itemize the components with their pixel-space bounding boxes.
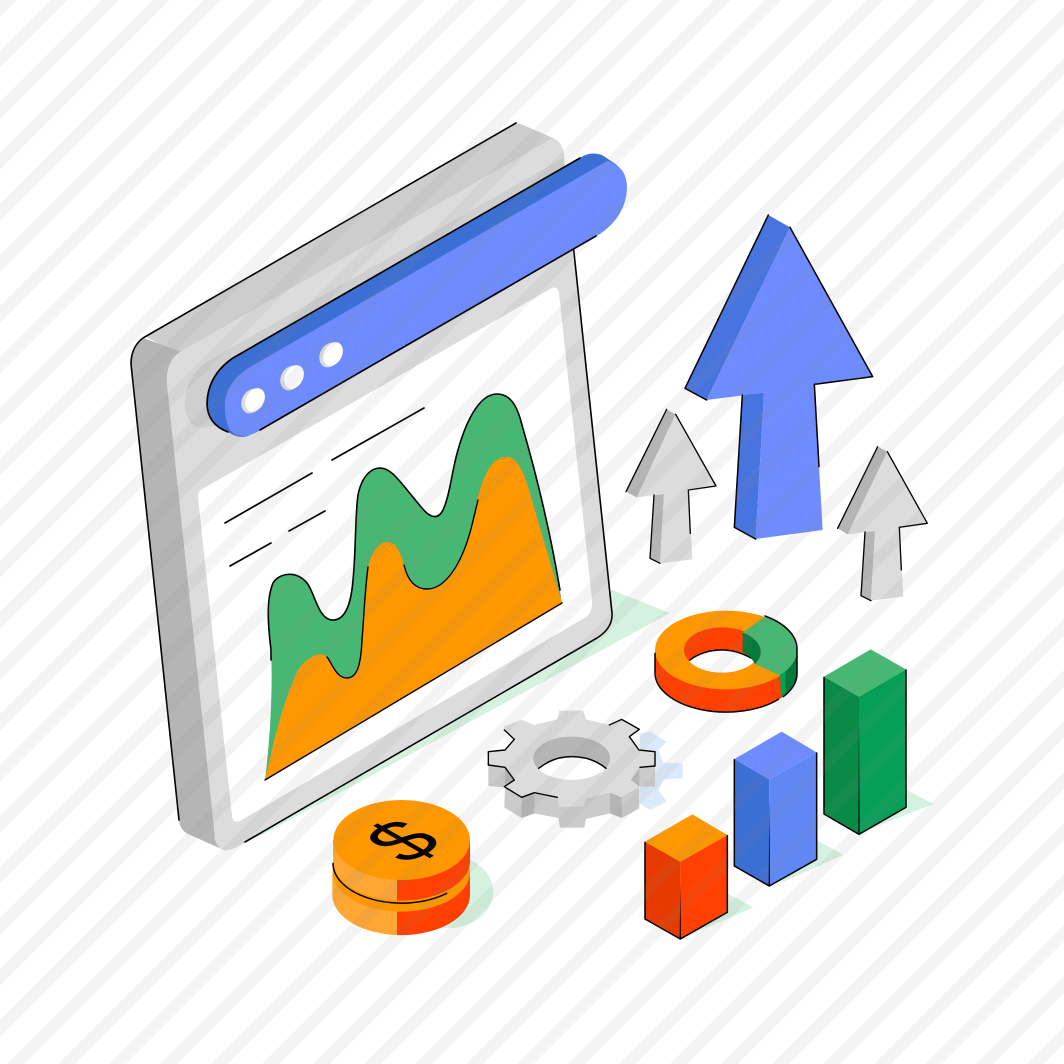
bar: green <box>824 649 933 834</box>
shadow: panel ground shadow <box>240 590 670 845</box>
donut hole opening <box>689 650 754 673</box>
panel top edge <box>145 124 563 356</box>
donut outline <box>655 616 797 712</box>
donut cut face <box>780 671 785 698</box>
arrow: small grey left <box>626 409 716 563</box>
lower objects <box>488 611 933 939</box>
coin face <box>333 800 470 880</box>
gear hole edge <box>539 757 606 768</box>
donut hole wall <box>684 627 760 673</box>
bar: red <box>645 814 753 939</box>
toolbar dot 1 <box>237 385 269 417</box>
panel front face <box>167 138 612 850</box>
gear <box>488 711 683 828</box>
green series <box>265 394 562 780</box>
text lines <box>225 408 424 566</box>
donut side <box>655 650 797 713</box>
gear outline <box>488 719 655 797</box>
toolbar dot 2 <box>276 362 308 394</box>
lower coin top <box>333 832 470 912</box>
screen <box>198 288 592 822</box>
arrow: large blue <box>685 215 873 539</box>
upper coin side <box>333 840 470 901</box>
toolbar <box>207 154 627 437</box>
toolbar dark side <box>207 154 620 437</box>
arrows <box>626 215 927 601</box>
bar: blue <box>734 732 843 886</box>
gear hole opening <box>538 757 606 780</box>
green series outline <box>268 394 560 660</box>
coin seam <box>333 863 447 903</box>
donut hole edge <box>690 650 752 660</box>
panel: browser window <box>131 123 627 851</box>
coin shadow <box>400 855 493 928</box>
coins <box>332 800 493 935</box>
donut green wall <box>743 633 761 664</box>
gear side <box>488 753 655 828</box>
toolbar dot 3 <box>315 339 347 371</box>
gear shadow <box>640 732 683 810</box>
orange series outline <box>265 500 562 780</box>
gear side facets <box>505 767 639 818</box>
gear face <box>488 711 655 807</box>
dollar sign: $ <box>345 807 462 874</box>
area chart <box>265 394 562 780</box>
panel outline <box>131 123 612 842</box>
orange series <box>265 457 562 780</box>
lower coin side <box>332 872 470 935</box>
panel left edge <box>131 338 226 851</box>
donut green top <box>743 617 797 675</box>
donut green side <box>780 650 797 697</box>
gear hole <box>533 737 610 780</box>
toolbar shadow <box>185 158 564 428</box>
arrow: small grey right <box>838 447 927 601</box>
donut top <box>655 611 797 689</box>
donut chart <box>655 611 797 713</box>
toolbar face <box>225 161 627 436</box>
toolbar outline <box>207 158 596 432</box>
